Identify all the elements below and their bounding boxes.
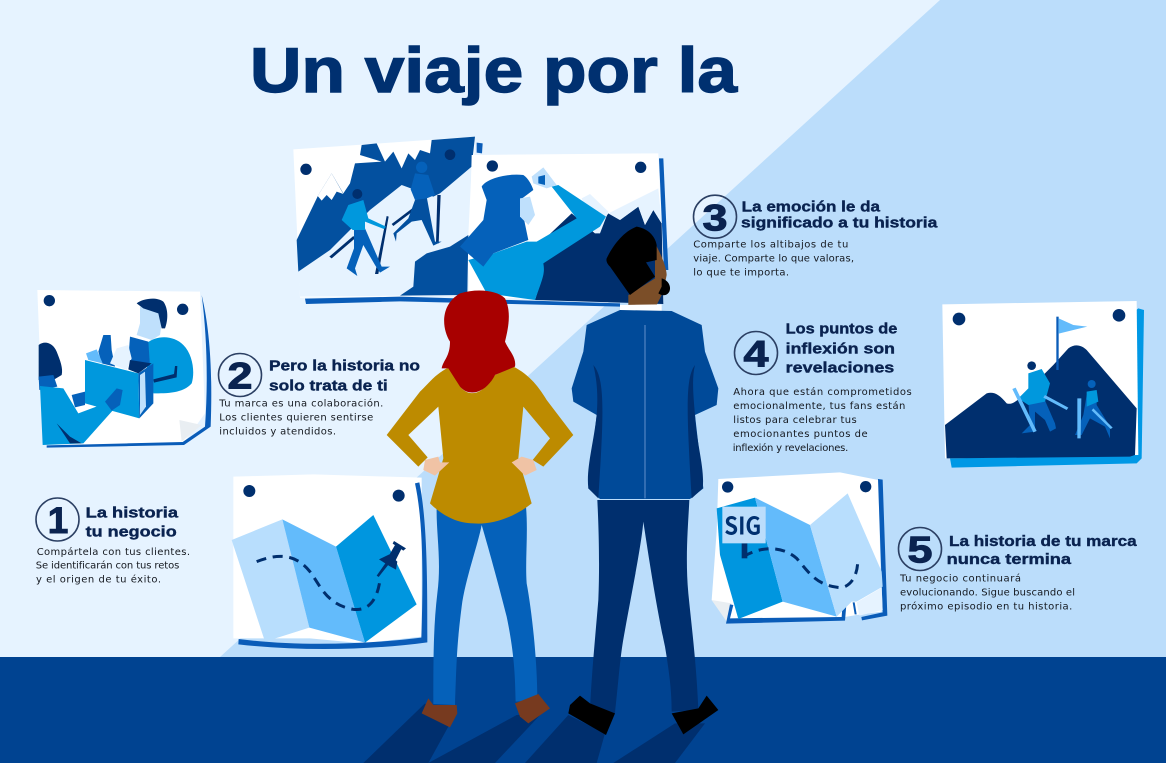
body 4: listos para celebrar tus <box>733 415 857 426</box>
body 2: Tu marca es una colaboración. <box>218 398 383 410</box>
heading 4: revelaciones <box>786 359 894 376</box>
hiker one <box>329 189 390 276</box>
text block: step 1 <box>36 498 190 585</box>
body 1: Se identificarán con tus retos <box>36 560 179 572</box>
person right <box>128 299 193 393</box>
heading 3: significado a tu historia <box>741 214 938 231</box>
panel: map illustration <box>232 474 427 649</box>
big hiker <box>1012 361 1068 433</box>
icon: map pin <box>377 541 406 577</box>
heading 4: Los puntos de <box>786 320 897 337</box>
hiker two <box>392 162 442 246</box>
number badge 3 <box>694 195 736 238</box>
text block: step 5 <box>898 528 1137 613</box>
body 4: inflexión y revelaciones. <box>733 442 848 454</box>
body 5: Tu negocio continuará <box>899 573 1021 585</box>
panel: collaboration illustration <box>37 290 211 448</box>
heading 1: La historia <box>86 504 179 521</box>
body 2: Los clientes quieren sentirse <box>219 413 373 424</box>
sign <box>722 507 766 543</box>
number badge 3: 3 <box>702 198 728 238</box>
small hiker <box>1075 380 1113 438</box>
title: Un viaje por la <box>250 36 738 106</box>
number badge 4 <box>734 332 778 374</box>
number badge 1 <box>36 498 79 541</box>
panel: hikers illustration <box>293 137 620 307</box>
sign label: SIG <box>724 506 761 541</box>
body 4: Ahora que están comprometidos <box>733 386 912 398</box>
heading 3: La emoción le da <box>742 199 881 216</box>
body 3: Comparte los altibajos de tu <box>693 240 848 251</box>
panel: mountain summit illustration <box>942 301 1144 468</box>
heading 5: La historia de tu marca <box>949 533 1137 550</box>
heading 2: solo trata de ti <box>269 378 388 395</box>
number badge 2 <box>218 354 262 396</box>
number badge 5 <box>898 528 942 570</box>
heading 2: Pero la historia no <box>269 358 420 375</box>
body 3: lo que te importa. <box>693 268 789 279</box>
body 3: viaje. Comparte lo que valoras, <box>693 254 854 265</box>
body 1: Compártela con tus clientes. <box>37 546 190 558</box>
figure: woman <box>387 291 573 727</box>
body 4: emocionalmente, tus fans están <box>733 400 905 412</box>
body 1: y el origen de tu éxito. <box>36 573 161 585</box>
text block: step 2 <box>218 354 420 437</box>
body 4: emocionantes puntos de <box>733 429 868 440</box>
body 5: próximo episodio en tu historia. <box>900 601 1072 613</box>
heading 5: nunca termina <box>947 551 1072 568</box>
figures: shadows on floor <box>363 703 705 763</box>
text block: step 3 <box>693 195 938 279</box>
icon: flag <box>1056 317 1087 370</box>
number badge 5: 5 <box>908 530 932 570</box>
figure: man <box>568 227 718 735</box>
floor <box>0 657 1166 763</box>
number badge 2: 2 <box>228 356 252 396</box>
body 5: evolucionando. Sigue buscando el <box>900 588 1075 599</box>
box of goods <box>85 335 153 418</box>
panel: next episode map <box>712 472 887 624</box>
heading 1: tu negocio <box>86 524 177 541</box>
text block: step 4 <box>733 320 912 454</box>
number badge 4: 4 <box>744 334 769 374</box>
panel: raised fist illustration <box>460 153 668 304</box>
body 2: incluidos y atendidos. <box>219 426 336 437</box>
person left <box>39 343 123 445</box>
heading 4: inflexión son <box>786 340 895 357</box>
number badge 1: 1 <box>48 500 68 541</box>
